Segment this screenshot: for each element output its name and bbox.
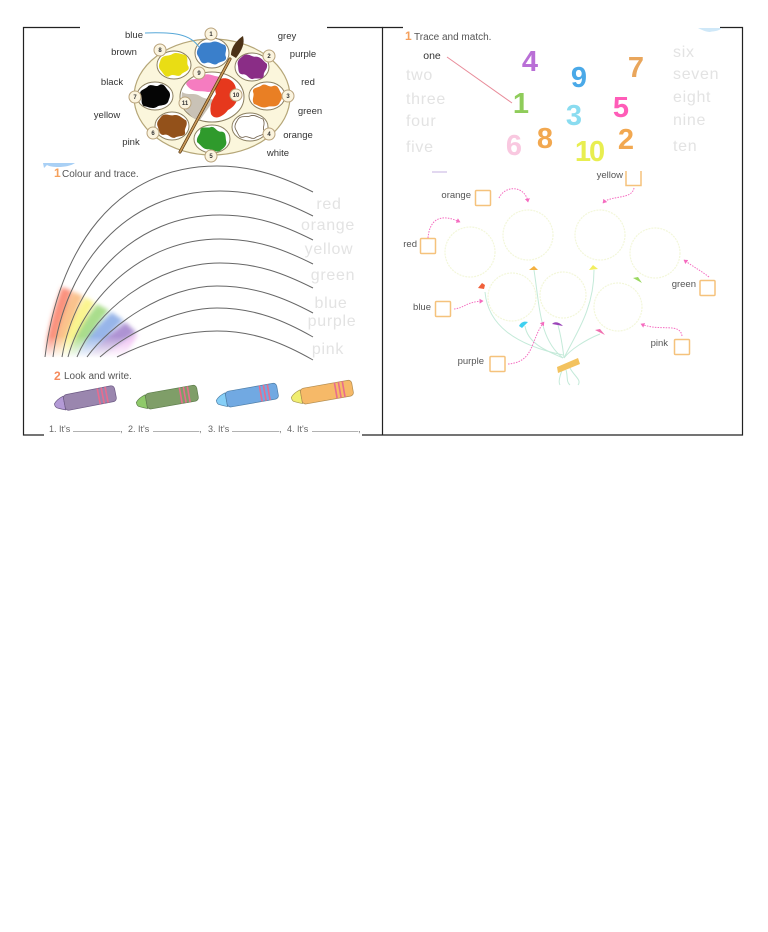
scattered numbers: 1	[513, 88, 529, 120]
balloon knots	[478, 265, 642, 335]
number badges: 11	[182, 101, 189, 107]
panel: trace and match	[405, 28, 722, 168]
heading: look and write	[54, 369, 132, 383]
header decoration	[43, 163, 75, 168]
heading: colour and trace: Colour and trace.	[62, 169, 139, 180]
writing lines	[49, 424, 361, 434]
example word: one: one	[423, 50, 441, 62]
right trace words	[673, 44, 719, 155]
painted rainbow bands	[43, 285, 139, 356]
writing lines: ,	[120, 424, 123, 434]
colour word labels: pink	[122, 137, 140, 148]
colour word labels: orange	[283, 130, 313, 141]
crayon: orange	[290, 380, 354, 406]
trace words: purple	[308, 313, 356, 330]
left trace words: four	[406, 113, 436, 130]
number badges: 4	[267, 132, 271, 138]
number badges: 5	[209, 154, 213, 160]
colour word labels: yellow	[94, 110, 120, 121]
right trace words: ten	[673, 138, 697, 155]
colour labels: green	[672, 279, 696, 290]
bottom fade of bands	[34, 336, 149, 368]
scattered numbers: 9	[571, 62, 587, 94]
scattered numbers: 10	[575, 136, 604, 168]
number badges	[129, 28, 294, 162]
worksheet frame	[24, 28, 742, 435]
colour labels: purple	[458, 356, 484, 367]
colour word labels	[94, 30, 322, 159]
scattered numbers: 6	[506, 130, 522, 162]
colour labels: orange	[441, 190, 471, 201]
answer boxes	[420, 171, 715, 372]
rainbow arc lines	[45, 166, 313, 360]
colour labels: red	[403, 239, 417, 250]
balloon outlines	[445, 210, 680, 331]
colour word labels: black	[101, 77, 123, 88]
paint blobs	[139, 41, 282, 155]
scattered numbers: 3	[566, 100, 582, 132]
writing lines: 4. It's	[287, 424, 309, 434]
writing lines: 1. It's	[49, 424, 71, 434]
panel: look and write	[49, 369, 361, 434]
left trace words: five	[406, 139, 434, 156]
panel: paint palette	[94, 28, 322, 162]
worksheet page	[22, 26, 744, 436]
number badges: 1	[209, 32, 213, 38]
right trace words: nine	[673, 112, 706, 129]
writing lines: ,	[199, 424, 202, 434]
scattered numbers: 2	[618, 124, 634, 156]
trace words: green	[311, 267, 355, 284]
number badges: 3	[286, 94, 290, 100]
scattered numbers: 4	[522, 46, 538, 78]
dotted arrows	[428, 188, 709, 364]
trace words: pink	[312, 341, 344, 358]
scattered numbers: 5	[613, 92, 629, 124]
colour labels: blue	[413, 302, 431, 313]
number badges: 2	[267, 54, 271, 60]
trace words: orange	[301, 217, 355, 234]
colour word labels: white	[266, 148, 289, 159]
number badges: 7	[133, 95, 137, 101]
left trace words: three	[406, 91, 446, 108]
colour word labels: brown	[111, 47, 137, 58]
heading: trace and match: 1	[405, 29, 412, 43]
crayon: green	[135, 385, 199, 411]
trace words	[301, 196, 356, 358]
balloon strings	[485, 270, 600, 385]
string tie	[557, 358, 580, 373]
writing lines: 3. It's	[208, 424, 230, 434]
panel: colour and trace rainbow	[34, 163, 356, 368]
panel: colour the balloons	[403, 170, 715, 385]
heading: trace and match: Trace and match.	[414, 32, 491, 43]
pointer line: blue	[145, 33, 199, 47]
colour word labels: green	[298, 106, 322, 117]
writing lines: ,	[358, 424, 361, 434]
heading: colour and trace: 1	[54, 166, 61, 180]
writing lines: ,	[279, 424, 282, 434]
number badges: 8	[158, 48, 162, 54]
trace words: blue	[314, 295, 348, 312]
number badges: 6	[151, 131, 155, 137]
heading: look and write: Look and write.	[64, 371, 132, 382]
right trace words: six	[673, 44, 695, 61]
right trace words: eight	[673, 89, 711, 106]
left trace words	[406, 67, 446, 156]
writing lines: 2. It's	[128, 424, 150, 434]
left trace words: two	[406, 67, 433, 84]
colour word labels: grey	[278, 31, 296, 42]
colour labels	[403, 170, 696, 367]
colour labels: yellow	[597, 170, 623, 181]
crayon: blue	[215, 383, 279, 409]
colour word labels: red	[301, 77, 315, 88]
number badges: 10	[233, 93, 240, 99]
match line	[447, 57, 512, 103]
trace words: red	[316, 196, 342, 213]
crayon: purple	[53, 385, 117, 413]
header stub	[432, 171, 447, 173]
palette tray	[134, 39, 290, 155]
right trace words: seven	[673, 66, 719, 83]
trace words: yellow	[305, 241, 353, 258]
paint wells	[137, 38, 285, 153]
colour word labels: purple	[290, 49, 316, 60]
colour word labels: blue	[125, 30, 143, 41]
heading: look and write: 2	[54, 369, 61, 383]
number badges: 9	[197, 71, 201, 77]
paintbrush	[180, 36, 244, 152]
corner decoration	[698, 28, 722, 32]
colour labels: pink	[651, 338, 668, 349]
scattered numbers: 7	[628, 52, 644, 84]
scattered numbers: 8	[537, 123, 553, 155]
scattered numbers	[506, 46, 644, 168]
